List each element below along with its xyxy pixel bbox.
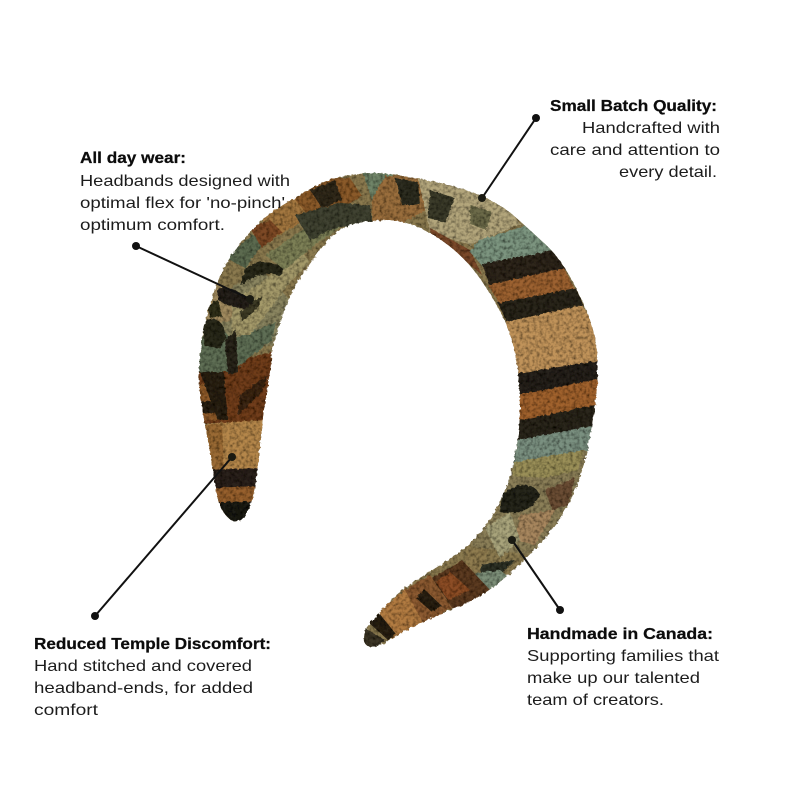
leader line and dot: [132, 242, 254, 303]
text block: optimum comfort.: [80, 217, 225, 234]
text block: make up our talented: [527, 670, 700, 687]
callout: all day wear: [80, 150, 290, 303]
text block: headband-ends, for added: [34, 680, 253, 697]
text block: [550, 98, 720, 181]
text block: Reduced Temple Discomfort:: [34, 636, 271, 653]
text block: Small Batch Quality:: [550, 98, 717, 115]
text block: Handcrafted with: [582, 120, 720, 137]
left temple end stripes: [195, 352, 272, 530]
left patterned section: [198, 227, 340, 374]
callout: small batch quality: [478, 98, 720, 202]
text block: Headbands designed with: [80, 173, 290, 190]
text block: team of creators.: [527, 692, 664, 709]
lower patterned section: [472, 450, 588, 596]
leader line and dot: [91, 453, 236, 620]
text block: [34, 636, 271, 719]
top patterned section: [250, 170, 520, 275]
text block: All day wear:: [80, 150, 186, 167]
text block: Handmade in Canada:: [527, 626, 713, 643]
callout: reduced temple discomfort: [34, 453, 271, 719]
leader line and dot: [478, 114, 540, 202]
text block: [527, 626, 720, 709]
text block: Hand stitched and covered: [34, 658, 252, 675]
text block: [80, 150, 290, 234]
callout: handmade in canada: [508, 536, 720, 709]
leader line and dot: [508, 536, 564, 614]
headband: [190, 160, 610, 660]
text block: Supporting families that: [527, 648, 720, 665]
right tip stripes: [358, 560, 490, 652]
text block: optimal flex for 'no-pinch': [80, 195, 285, 212]
text block: every detail.: [619, 164, 717, 181]
right colour stripes: [470, 226, 604, 468]
text block: comfort: [34, 702, 99, 719]
text block: care and attention to: [550, 142, 720, 159]
